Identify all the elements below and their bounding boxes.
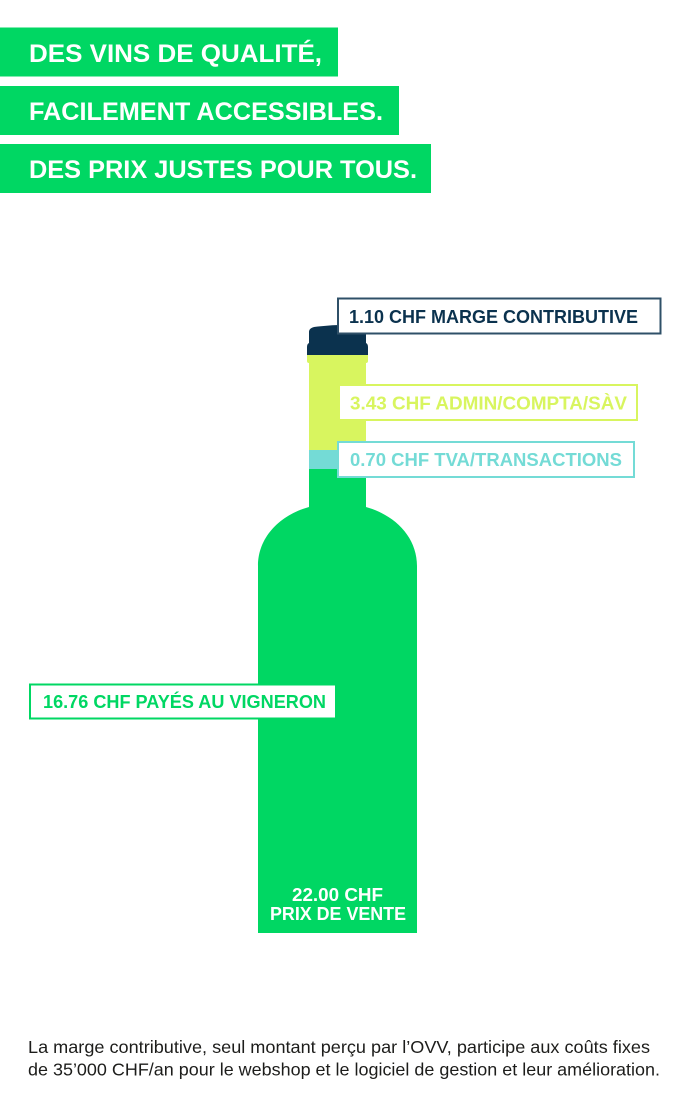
title line 3: DES PRIX JUSTES POUR TOUS. bbox=[29, 156, 417, 184]
selling price label bbox=[270, 885, 406, 924]
title line 1: DES VINS DE QUALITÉ, bbox=[29, 39, 322, 68]
bottle segment: VAT and transactions bbox=[309, 450, 366, 469]
selling price label: PRIX DE VENTE bbox=[270, 904, 406, 924]
title line 3 bbox=[0, 144, 431, 193]
label: admin bbox=[339, 385, 637, 420]
label: admin: 3.43 CHF ADMIN/COMPTA/SÀV bbox=[350, 392, 627, 414]
bottle cap: contribution margin bbox=[307, 325, 368, 355]
label: contribution margin bbox=[338, 298, 660, 334]
footnote: de 35’000 CHF/an pour le webshop et le logiciel de gestion et leur amélioration. bbox=[28, 1060, 660, 1080]
title line 1 bbox=[0, 28, 338, 76]
title bbox=[0, 28, 431, 193]
bottle body: paid to winegrower bbox=[258, 469, 417, 933]
label: VAT and transactions: 0.70 CHF TVA/TRANSACTIONS bbox=[350, 450, 622, 470]
label: paid to winegrower bbox=[30, 684, 336, 718]
footnote: La marge contributive, seul montant perçu par l’OVV, participe aux coûts fixes bbox=[28, 1037, 650, 1057]
title line 2 bbox=[0, 86, 399, 135]
label: VAT and transactions bbox=[338, 442, 634, 477]
title line 2: FACILEMENT ACCESSIBLES. bbox=[29, 98, 383, 126]
label: contribution margin: 1.10 CHF MARGE CONTRIBUTIVE bbox=[349, 307, 638, 327]
footnote bbox=[28, 1037, 660, 1080]
selling price label: 22.00 CHF bbox=[292, 885, 383, 905]
bottle segment: admin bbox=[307, 355, 368, 450]
bottle chart bbox=[258, 325, 417, 933]
label: paid to winegrower: 16.76 CHF PAYÉS AU VIGNERON bbox=[43, 691, 326, 712]
